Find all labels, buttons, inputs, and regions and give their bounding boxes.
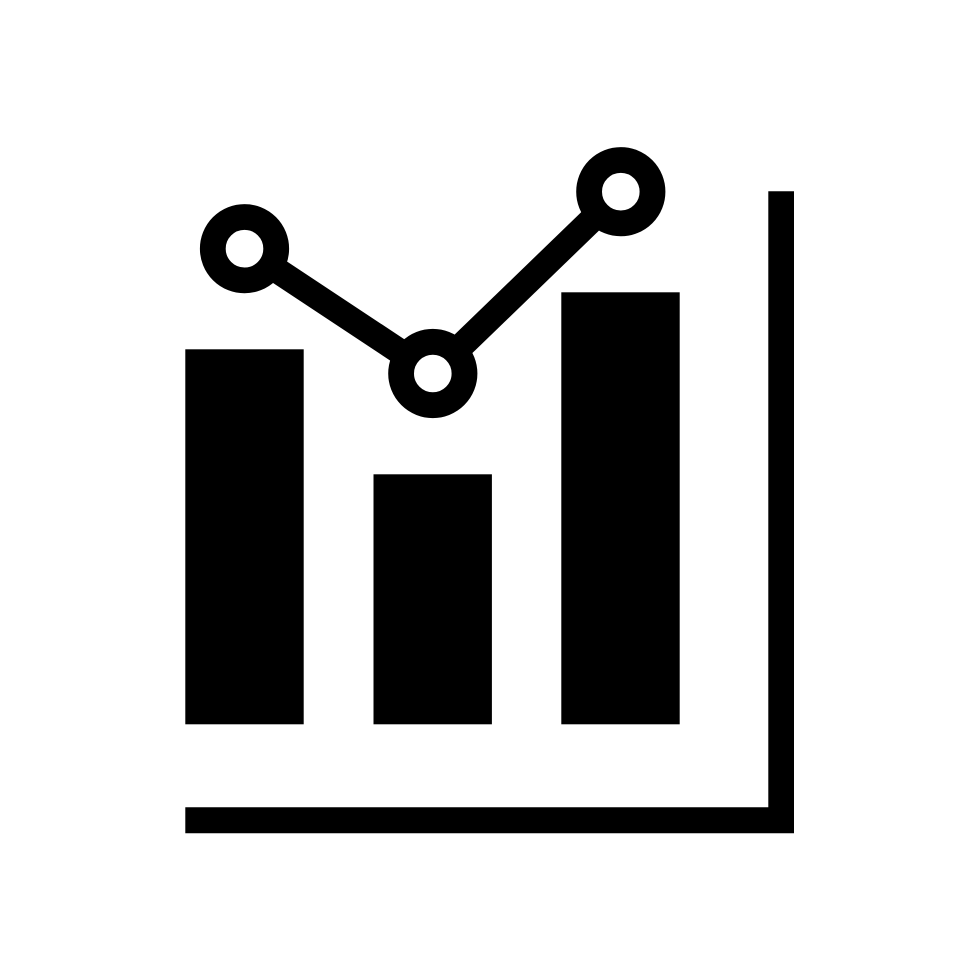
marker: middle [401,342,464,405]
marker: right [589,160,652,223]
bar: left [185,349,304,724]
trend line [244,192,621,374]
axis frame [185,191,794,833]
marker: left [213,217,276,280]
bar: middle [374,474,492,724]
bar: right [561,292,680,724]
